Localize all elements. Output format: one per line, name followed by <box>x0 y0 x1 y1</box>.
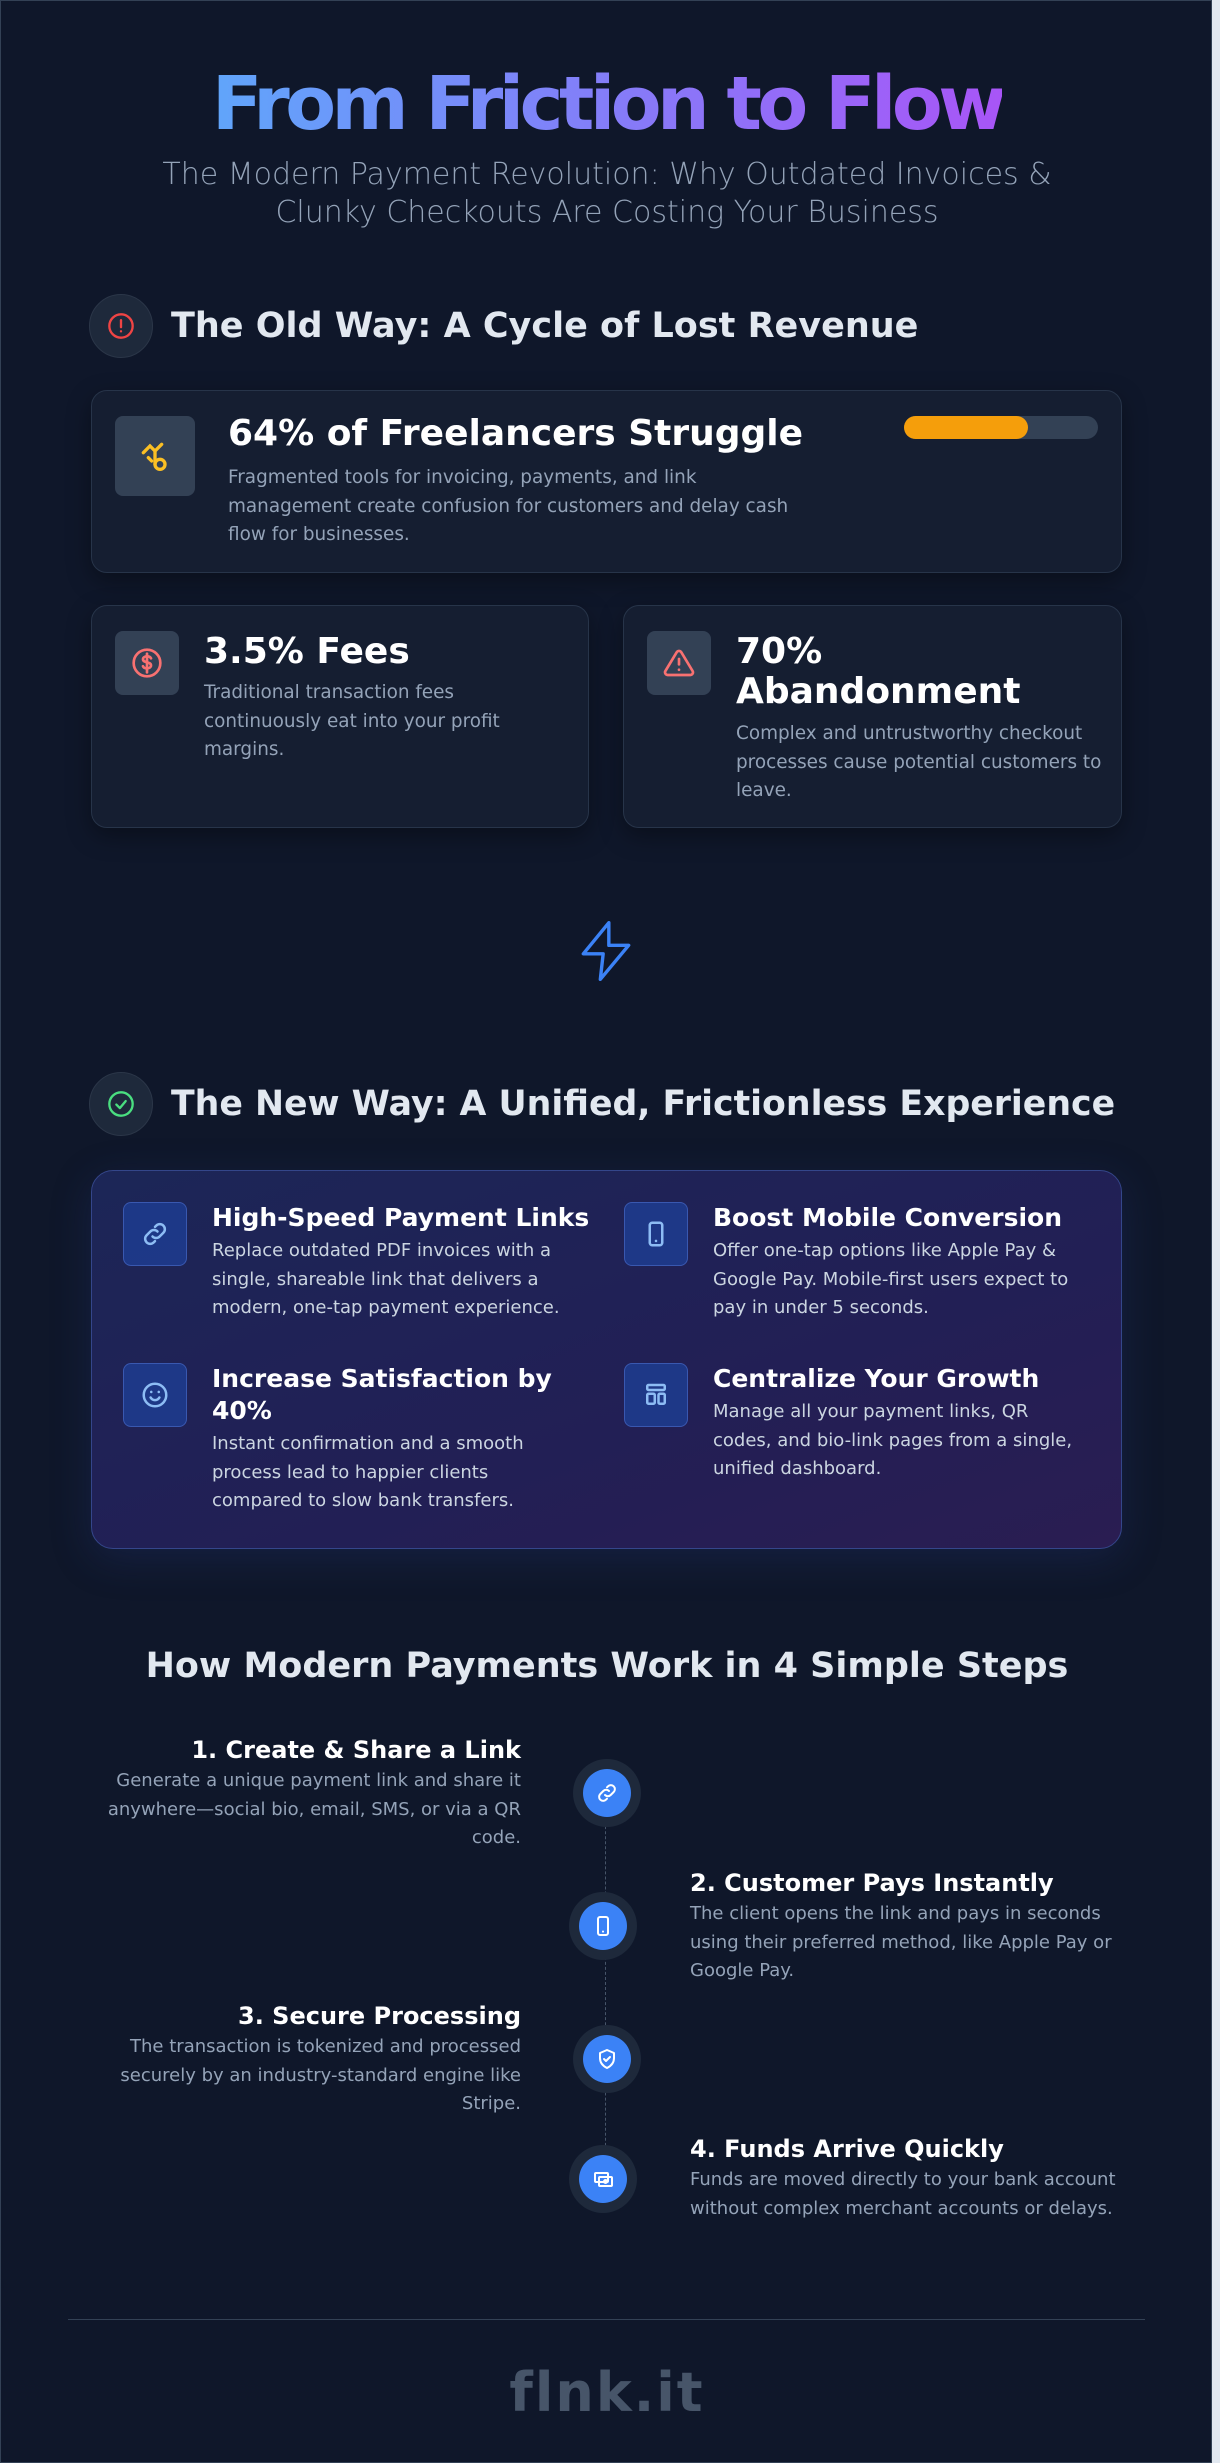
step 2: 2. Customer Pays Instantly <box>690 1869 1054 1897</box>
icon: money <box>115 416 195 496</box>
description: Traditional transaction fees <box>204 682 454 703</box>
stat title: 3.5% Fees <box>204 631 410 672</box>
icon: check circle <box>89 1072 153 1136</box>
description: processes cause potential customers to <box>736 752 1101 772</box>
card: 64% freelancers <box>91 390 1122 573</box>
section heading: old way <box>89 294 918 358</box>
feature: satisfaction: Instant confirmation and a smooth <box>212 1433 524 1454</box>
step 3: securely by an industry-standard engine like <box>120 2064 521 2086</box>
description <box>228 467 788 545</box>
stat title: Abandonment <box>736 671 1020 712</box>
stat title: 70% <box>736 631 822 672</box>
feature: centralize: unified dashboard. <box>713 1458 881 1479</box>
heading text: The New Way: A Unified, Frictionless Experience <box>171 1084 1115 1124</box>
step 2: using their preferred method, like Apple Pay or <box>690 1932 1112 1952</box>
feature: mobile conversion <box>624 1202 1068 1318</box>
title: From Friction to Flow <box>212 61 1002 147</box>
description: Complex and untrustworthy checkout <box>736 723 1082 744</box>
dashed connector <box>605 1791 606 2181</box>
description: flow for businesses. <box>228 524 410 545</box>
step 1: Generate a unique payment link and share it <box>116 1770 521 1791</box>
progress bar 64% <box>904 416 1098 439</box>
description: leave. <box>736 780 792 801</box>
icon: link <box>123 1202 187 1266</box>
panel: benefits <box>91 1170 1122 1549</box>
section heading: new way <box>89 1072 1115 1136</box>
feature: payment links: single, shareable link that delivers a <box>212 1268 538 1290</box>
subtitle <box>162 157 1052 230</box>
step 2: Google Pay. <box>690 1960 794 1981</box>
step 1: anywhere—social bio, email, SMS, or via a QR <box>108 1798 521 1820</box>
icon: smile <box>123 1363 187 1427</box>
feature: satisfaction <box>123 1363 552 1511</box>
feature: mobile conversion: Offer one-tap options like Apple Pay & <box>713 1240 1056 1261</box>
step 2 <box>569 1869 1112 1981</box>
step 4: 4. Funds Arrive Quickly <box>690 2135 1004 2163</box>
step 2: The client opens the link and pays in seconds <box>690 1903 1101 1924</box>
footer logo: flnk.it <box>509 2361 705 2424</box>
feature: payment links: Replace outdated PDF invoices with a <box>212 1240 551 1261</box>
step 3: The transaction is tokenized and processed <box>130 2036 521 2057</box>
feature: centralize <box>624 1363 1072 1479</box>
feature: centralize: Manage all your payment links, QR <box>713 1401 1028 1422</box>
timeline <box>108 1736 1116 2218</box>
icon: phone <box>624 1202 688 1266</box>
step 1: 1. Create & Share a Link <box>191 1736 521 1764</box>
description: continuously eat into your profit <box>204 710 500 732</box>
icon: link node <box>573 1759 641 1827</box>
step 1: code. <box>472 1827 521 1848</box>
feature: mobile conversion: pay in under 5 seconds. <box>713 1297 929 1318</box>
step 4: without complex merchant accounts or delays. <box>690 2198 1113 2218</box>
icon: warning <box>647 631 711 695</box>
description <box>204 682 500 760</box>
card: 70% abandonment <box>623 605 1122 828</box>
icon: money node <box>569 2145 637 2213</box>
subtitle: Clunky Checkouts Are Costing Your Business <box>275 195 939 230</box>
feature: satisfaction: process lead to happier clients <box>212 1462 488 1482</box>
stat title: 64% of Freelancers Struggle <box>228 413 803 454</box>
feature: satisfaction: 40% <box>212 1396 272 1425</box>
card: 3.5% fees <box>91 605 589 828</box>
step 4 <box>569 2135 1116 2218</box>
step 4: Funds are moved directly to your bank account <box>690 2169 1116 2190</box>
step 3: 3. Secure Processing <box>238 2002 521 2030</box>
icon: dollar <box>115 631 179 695</box>
feature: payment links: modern, one-tap payment experience. <box>212 1297 560 1318</box>
icon: dashboard <box>624 1363 688 1427</box>
subtitle: The Modern Payment Revolution: Why Outdated Invoices & <box>162 157 1052 192</box>
description: management create confusion for customers and delay cash <box>228 496 788 516</box>
feature: satisfaction: Increase Satisfaction by <box>212 1364 552 1393</box>
feature: payment links: High-Speed Payment Links <box>212 1203 589 1232</box>
icon: shield node <box>573 2025 641 2093</box>
feature: payment links <box>123 1202 589 1318</box>
feature: satisfaction: compared to slow bank transfers. <box>212 1490 514 1511</box>
feature: mobile conversion: Boost Mobile Conversion <box>713 1203 1062 1232</box>
description: margins. <box>204 739 284 760</box>
description: Fragmented tools for invoicing, payments, and link <box>228 467 696 488</box>
description <box>736 723 1101 801</box>
step 1 <box>108 1736 641 1848</box>
icon: lightning bolt <box>582 921 630 981</box>
heading text: The Old Way: A Cycle of Lost Revenue <box>171 306 918 346</box>
feature: centralize: codes, and bio-link pages from a single, <box>713 1430 1072 1450</box>
icon: phone node <box>569 1892 637 1960</box>
icon: alert circle <box>89 294 153 358</box>
stat title <box>736 631 1020 712</box>
step 3 <box>120 2002 641 2114</box>
heading: steps: How Modern Payments Work in 4 Simple Steps <box>146 1646 1068 1686</box>
step 3: Stripe. <box>462 2093 521 2114</box>
feature: mobile conversion: Google Pay. Mobile-first users expect to <box>713 1268 1068 1290</box>
feature: centralize: Centralize Your Growth <box>713 1364 1039 1393</box>
